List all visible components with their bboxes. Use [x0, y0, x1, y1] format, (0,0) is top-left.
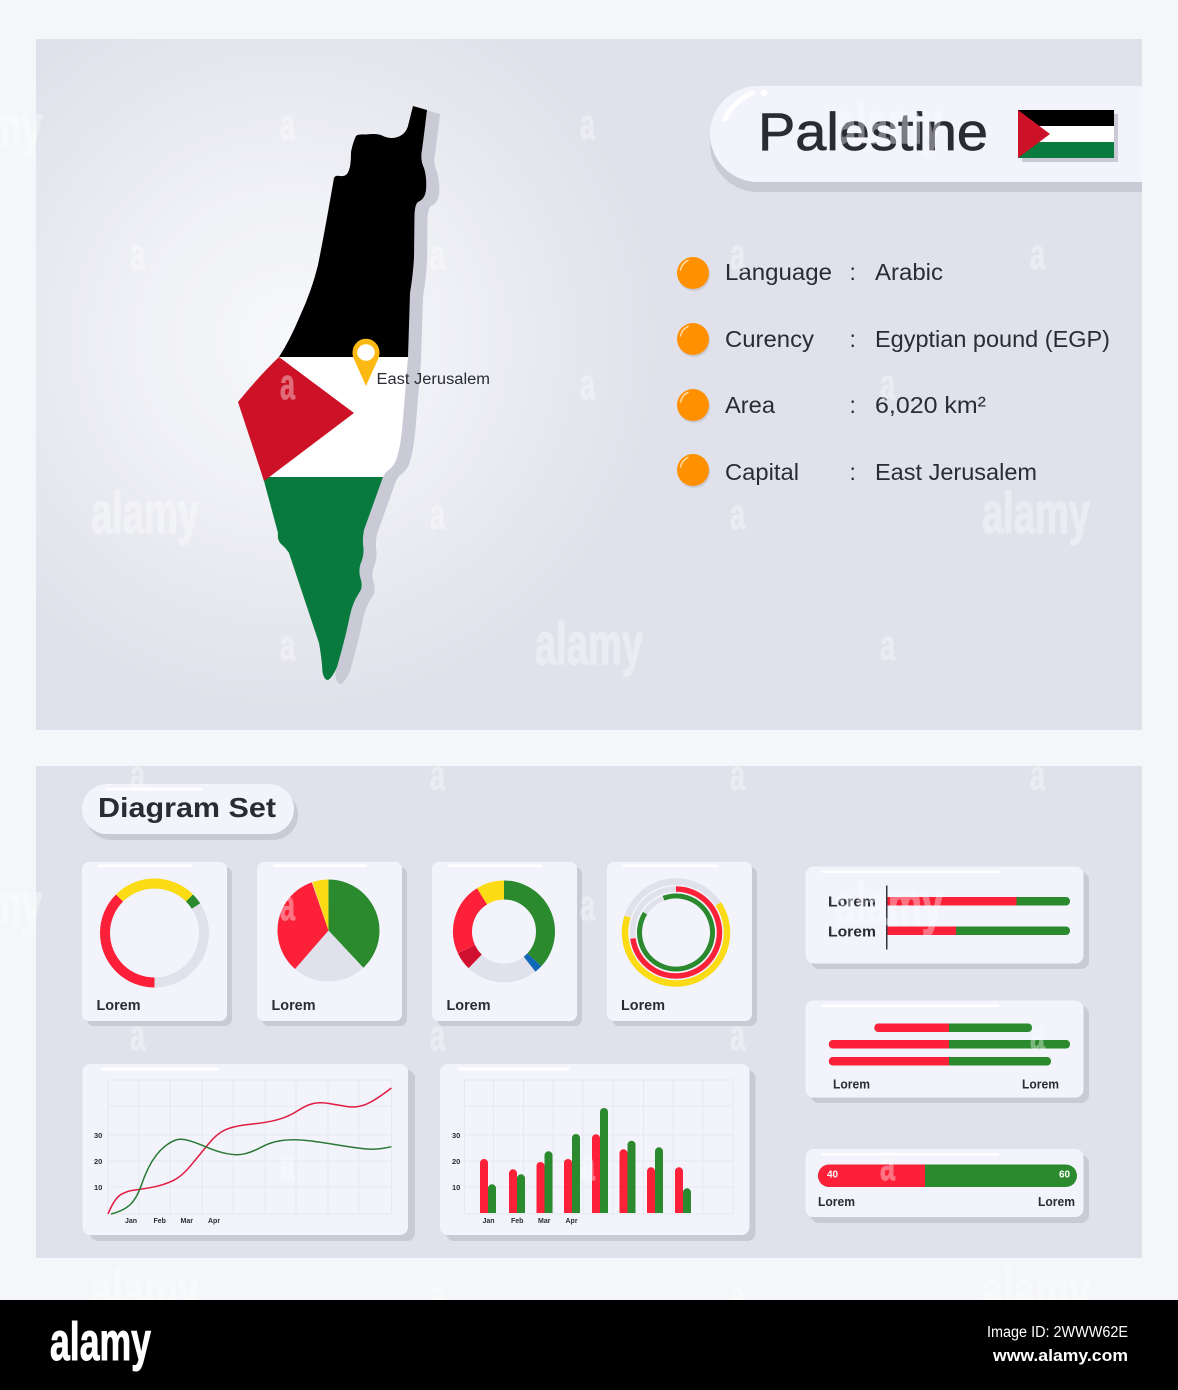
watermarks: a: [280, 1141, 295, 1190]
watermarks: a: [580, 100, 595, 149]
heading pill: Diagram Set: [82, 784, 298, 840]
card: 40/60 split bar: Lorem: [818, 1195, 855, 1209]
card: donut chart: [432, 862, 582, 1026]
icon: map pin: [352, 339, 380, 386]
heading: Palestine: Palestine: [758, 103, 988, 162]
watermarks: alamy: [835, 872, 943, 937]
watermarks: a: [1030, 1011, 1045, 1060]
card: ring gauge: [82, 862, 232, 1026]
watermarks: alamy: [982, 481, 1090, 546]
card: line chart: Feb: [154, 1218, 166, 1225]
info row: currency: [677, 323, 1110, 357]
watermarks: a: [280, 881, 295, 930]
info row: language: :: [850, 259, 856, 285]
title pill: [710, 86, 1142, 192]
card: bar chart: [440, 1064, 756, 1241]
watermarks: a: [730, 1271, 745, 1320]
card: line chart: [82, 1064, 415, 1241]
card: line chart: Jan: [125, 1218, 137, 1225]
card: bar chart: Mar: [538, 1218, 551, 1225]
watermarks: a: [130, 751, 145, 800]
info row: language: Language: [725, 259, 832, 285]
info row: capital: East Jerusalem: [875, 459, 1037, 485]
watermarks: a: [580, 360, 595, 409]
watermarks: alamy: [91, 481, 199, 546]
watermarks: a: [880, 621, 895, 670]
card: horizontal progress bars: Lorem: [828, 924, 876, 940]
card: line chart: Apr: [208, 1218, 220, 1225]
watermarks: a: [730, 230, 745, 279]
info row: currency: :: [850, 326, 856, 352]
card: 40/60 split bar: 40: [827, 1170, 839, 1180]
card: pie chart: [257, 862, 407, 1026]
card: bar chart: 20: [452, 1157, 460, 1166]
panel: diagram set: [36, 766, 1142, 1258]
card: line chart: Mar: [180, 1218, 193, 1225]
card: 40/60 split bar: Lorem: [1038, 1195, 1075, 1209]
watermarks: a: [430, 490, 445, 539]
info row: area: Area: [725, 392, 775, 418]
card: diverging bars: Lorem: [1022, 1078, 1059, 1092]
map of Palestine with flag fill: [230, 100, 440, 687]
watermarks: alamy: [535, 612, 643, 677]
footer logo: alamy: alamy: [50, 1312, 151, 1372]
card: radial bars: Lorem: [621, 998, 665, 1014]
watermarks: a: [430, 1011, 445, 1060]
watermarks: a: [1030, 751, 1045, 800]
map label: East Jerusalem: East Jerusalem: [376, 371, 490, 388]
card: line chart: 20: [94, 1157, 102, 1166]
watermarks: alamy: [835, 91, 943, 156]
card: line chart: 10: [94, 1183, 102, 1192]
watermarks: a: [280, 100, 295, 149]
heading pill: Diagram Set: Diagram Set: [98, 792, 276, 823]
card: bar chart: Apr: [566, 1218, 578, 1225]
watermarks: a: [430, 751, 445, 800]
info row: capital: :: [850, 459, 856, 485]
card: horizontal progress bars: [806, 866, 1089, 969]
info row: area: [677, 389, 986, 423]
info row: capital: Capital: [725, 459, 799, 485]
watermarks: a: [880, 360, 895, 409]
watermarks: a: [730, 751, 745, 800]
watermarks: a: [730, 490, 745, 539]
card: radial bars: [605, 862, 757, 1026]
info row: area: :: [850, 392, 856, 418]
info row: capital: [677, 454, 1037, 488]
watermarks: a: [430, 230, 445, 279]
watermarks: a: [730, 1011, 745, 1060]
card: ring gauge: Lorem: [96, 998, 140, 1014]
info row: area: 6,020 km²: [875, 392, 986, 418]
footer image id: Image ID: 2WWW62E: [987, 1324, 1128, 1341]
watermarks: alamy: [91, 1259, 199, 1324]
footer url: www.alamy.com: [992, 1346, 1128, 1365]
watermarks: a: [580, 1141, 595, 1190]
icon: flag: [1018, 110, 1118, 162]
watermarks: a: [880, 1141, 895, 1190]
watermarks: a: [280, 360, 295, 409]
watermarks: a: [430, 1271, 445, 1320]
card: bar chart: 30: [452, 1131, 460, 1140]
watermarks: alamy: [982, 1259, 1090, 1324]
card: pie chart: Lorem: [272, 998, 316, 1014]
card: bar chart: Feb: [511, 1218, 523, 1225]
watermarks: a: [1030, 230, 1045, 279]
watermarks: a: [130, 230, 145, 279]
card: bar chart: Jan: [482, 1218, 495, 1225]
card: 40/60 split bar: 60: [1059, 1170, 1071, 1180]
watermarks: a: [580, 881, 595, 930]
footer bar: [0, 1300, 1178, 1390]
card: bar chart: 10: [452, 1183, 460, 1192]
card: diverging bars: [806, 1000, 1089, 1103]
card: line chart: 30: [94, 1131, 102, 1140]
panel: country overview: [36, 39, 1142, 730]
info row: currency: Egyptian pound (EGP): [875, 326, 1110, 352]
info row: language: Arabic: [875, 259, 943, 285]
card: diverging bars: Lorem: [833, 1078, 870, 1092]
watermarks: a: [130, 1011, 145, 1060]
info row: currency: Curency: [725, 326, 815, 352]
info row: language: [677, 257, 943, 291]
card: 40/60 split bar: [806, 1149, 1089, 1223]
card: donut chart: Lorem: [446, 998, 490, 1014]
watermarks: a: [280, 621, 295, 670]
card: horizontal progress bars: Lorem: [828, 894, 876, 910]
